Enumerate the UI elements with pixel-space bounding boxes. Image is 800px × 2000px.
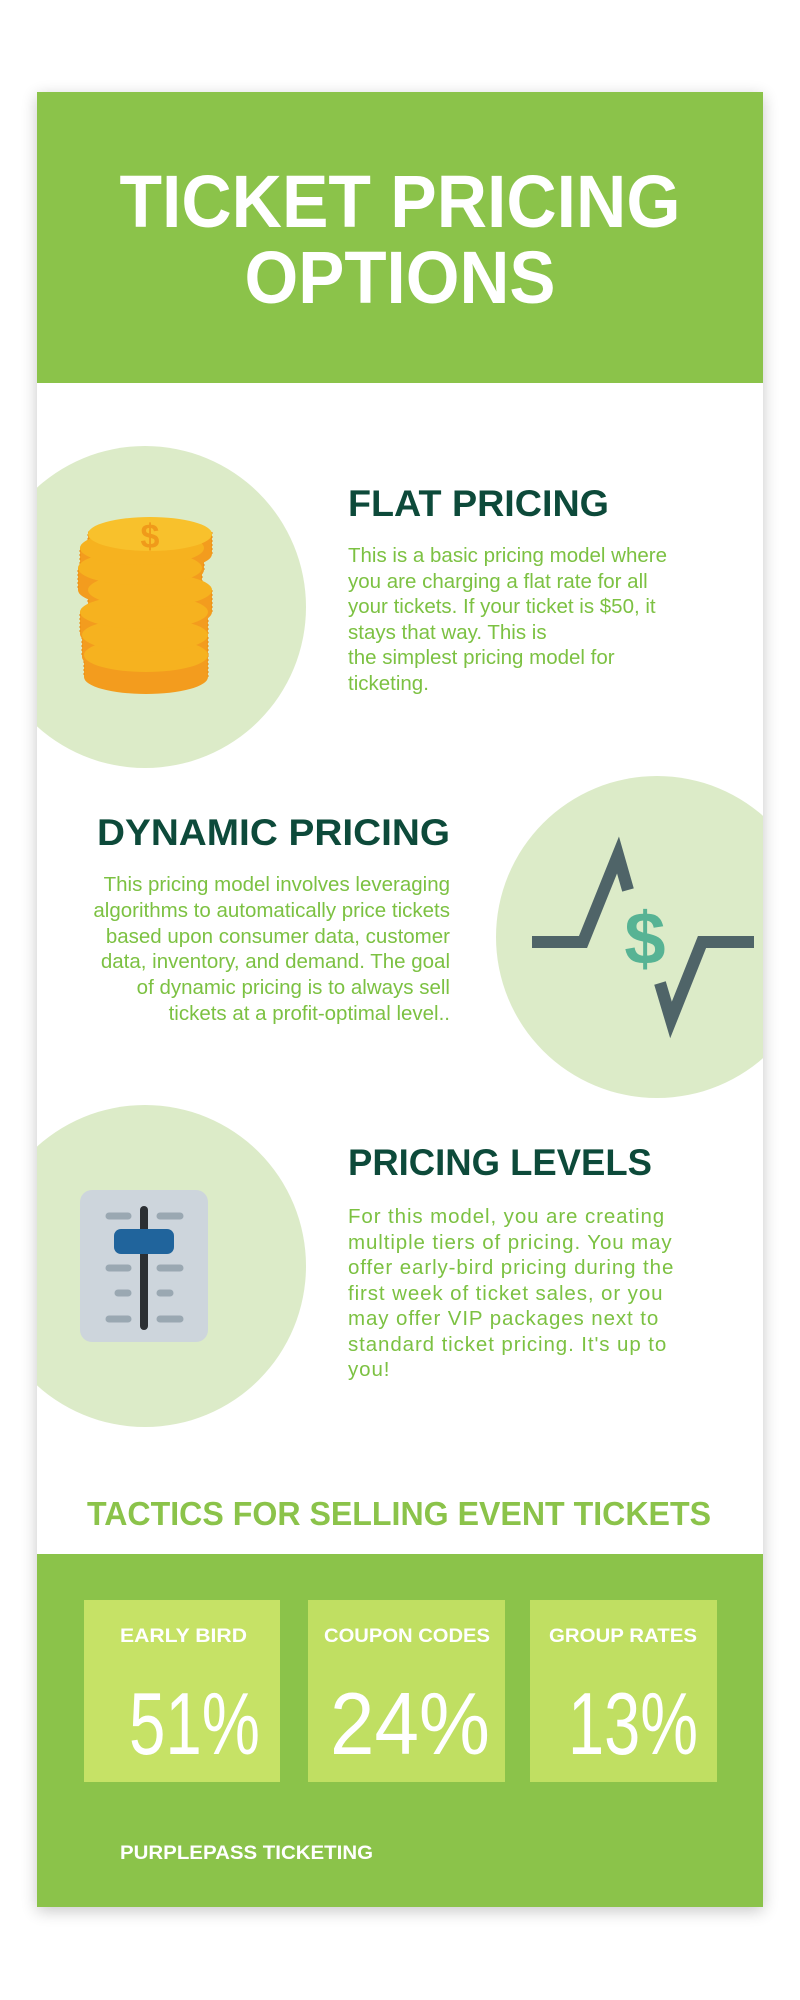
stat: coupon codes: 24% (330, 1674, 490, 1773)
text: pricing levels body: may offer VIP packages next to (348, 1307, 659, 1330)
text: dynamic pricing body: based upon consumer data, customer (106, 925, 450, 948)
stat: coupon codes (308, 1600, 505, 1782)
stat: coupon codes: COUPON CODES (324, 1626, 490, 1647)
text: flat pricing body: the simplest pricing model for (348, 646, 615, 669)
title: OPTIONS (244, 236, 556, 319)
text: pricing levels body: offer early-bird pricing during the (348, 1256, 674, 1279)
text: dynamic pricing body: This pricing model involves leveraging (104, 873, 450, 896)
heading: tactics: TACTICS FOR SELLING EVENT TICKETS (87, 1495, 711, 1532)
title (120, 160, 680, 319)
text: pricing levels body: you! (348, 1358, 390, 1381)
text: dynamic pricing body: tickets at a profit-optimal level.. (169, 1002, 450, 1025)
icon: coin stack (78, 517, 212, 694)
stat: early bird: 51% (129, 1674, 260, 1773)
text: flat pricing body: ticketing. (348, 672, 429, 695)
text: pricing levels body: standard ticket pricing. It's up to (348, 1333, 667, 1356)
circle: pricing levels (37, 1105, 306, 1427)
circle: flat pricing (37, 446, 306, 768)
stat: early bird (84, 1600, 280, 1782)
icon: slider (80, 1190, 208, 1342)
text: pricing levels body (348, 1205, 674, 1381)
text: pricing levels body: multiple tiers of pricing. You may (348, 1231, 673, 1254)
stat: early bird: EARLY BIRD (120, 1626, 247, 1647)
text: flat pricing body: your tickets. If your ticket is $50, it (348, 595, 656, 618)
text: dynamic pricing body: of dynamic pricing is to always sell (137, 976, 450, 999)
icon: coin stack: $ (141, 518, 160, 556)
footer credit: PURPLEPASS TICKETING (120, 1843, 373, 1864)
text: pricing levels body: For this model, you are creating (348, 1205, 665, 1228)
text: flat pricing body (348, 544, 667, 695)
text: flat pricing body: stays that way. This is (348, 621, 547, 644)
header band (37, 92, 763, 383)
icon: price zigzag: $ (624, 897, 666, 980)
circle: dynamic pricing (496, 776, 763, 1098)
title: TICKET PRICING (120, 160, 680, 243)
icon: price zigzag (532, 855, 754, 1020)
text: dynamic pricing body: data, inventory, and demand. The goal (101, 950, 450, 973)
text: flat pricing body: This is a basic pricing model where (348, 544, 667, 567)
stat: group rates: 13% (568, 1674, 698, 1773)
heading: dynamic pricing: DYNAMIC PRICING (97, 812, 450, 853)
panel: tactics footer (37, 1554, 763, 1907)
heading: pricing levels: PRICING LEVELS (348, 1142, 652, 1183)
stat: group rates: GROUP RATES (549, 1626, 697, 1647)
stat: group rates (530, 1600, 717, 1782)
text: flat pricing body: you are charging a flat rate for all (348, 570, 648, 593)
text: dynamic pricing body (93, 873, 450, 1025)
text: dynamic pricing body: algorithms to automatically price tickets (93, 899, 450, 922)
heading: flat pricing: FLAT PRICING (348, 483, 609, 524)
text: pricing levels body: first week of ticket sales, or you (348, 1282, 663, 1305)
